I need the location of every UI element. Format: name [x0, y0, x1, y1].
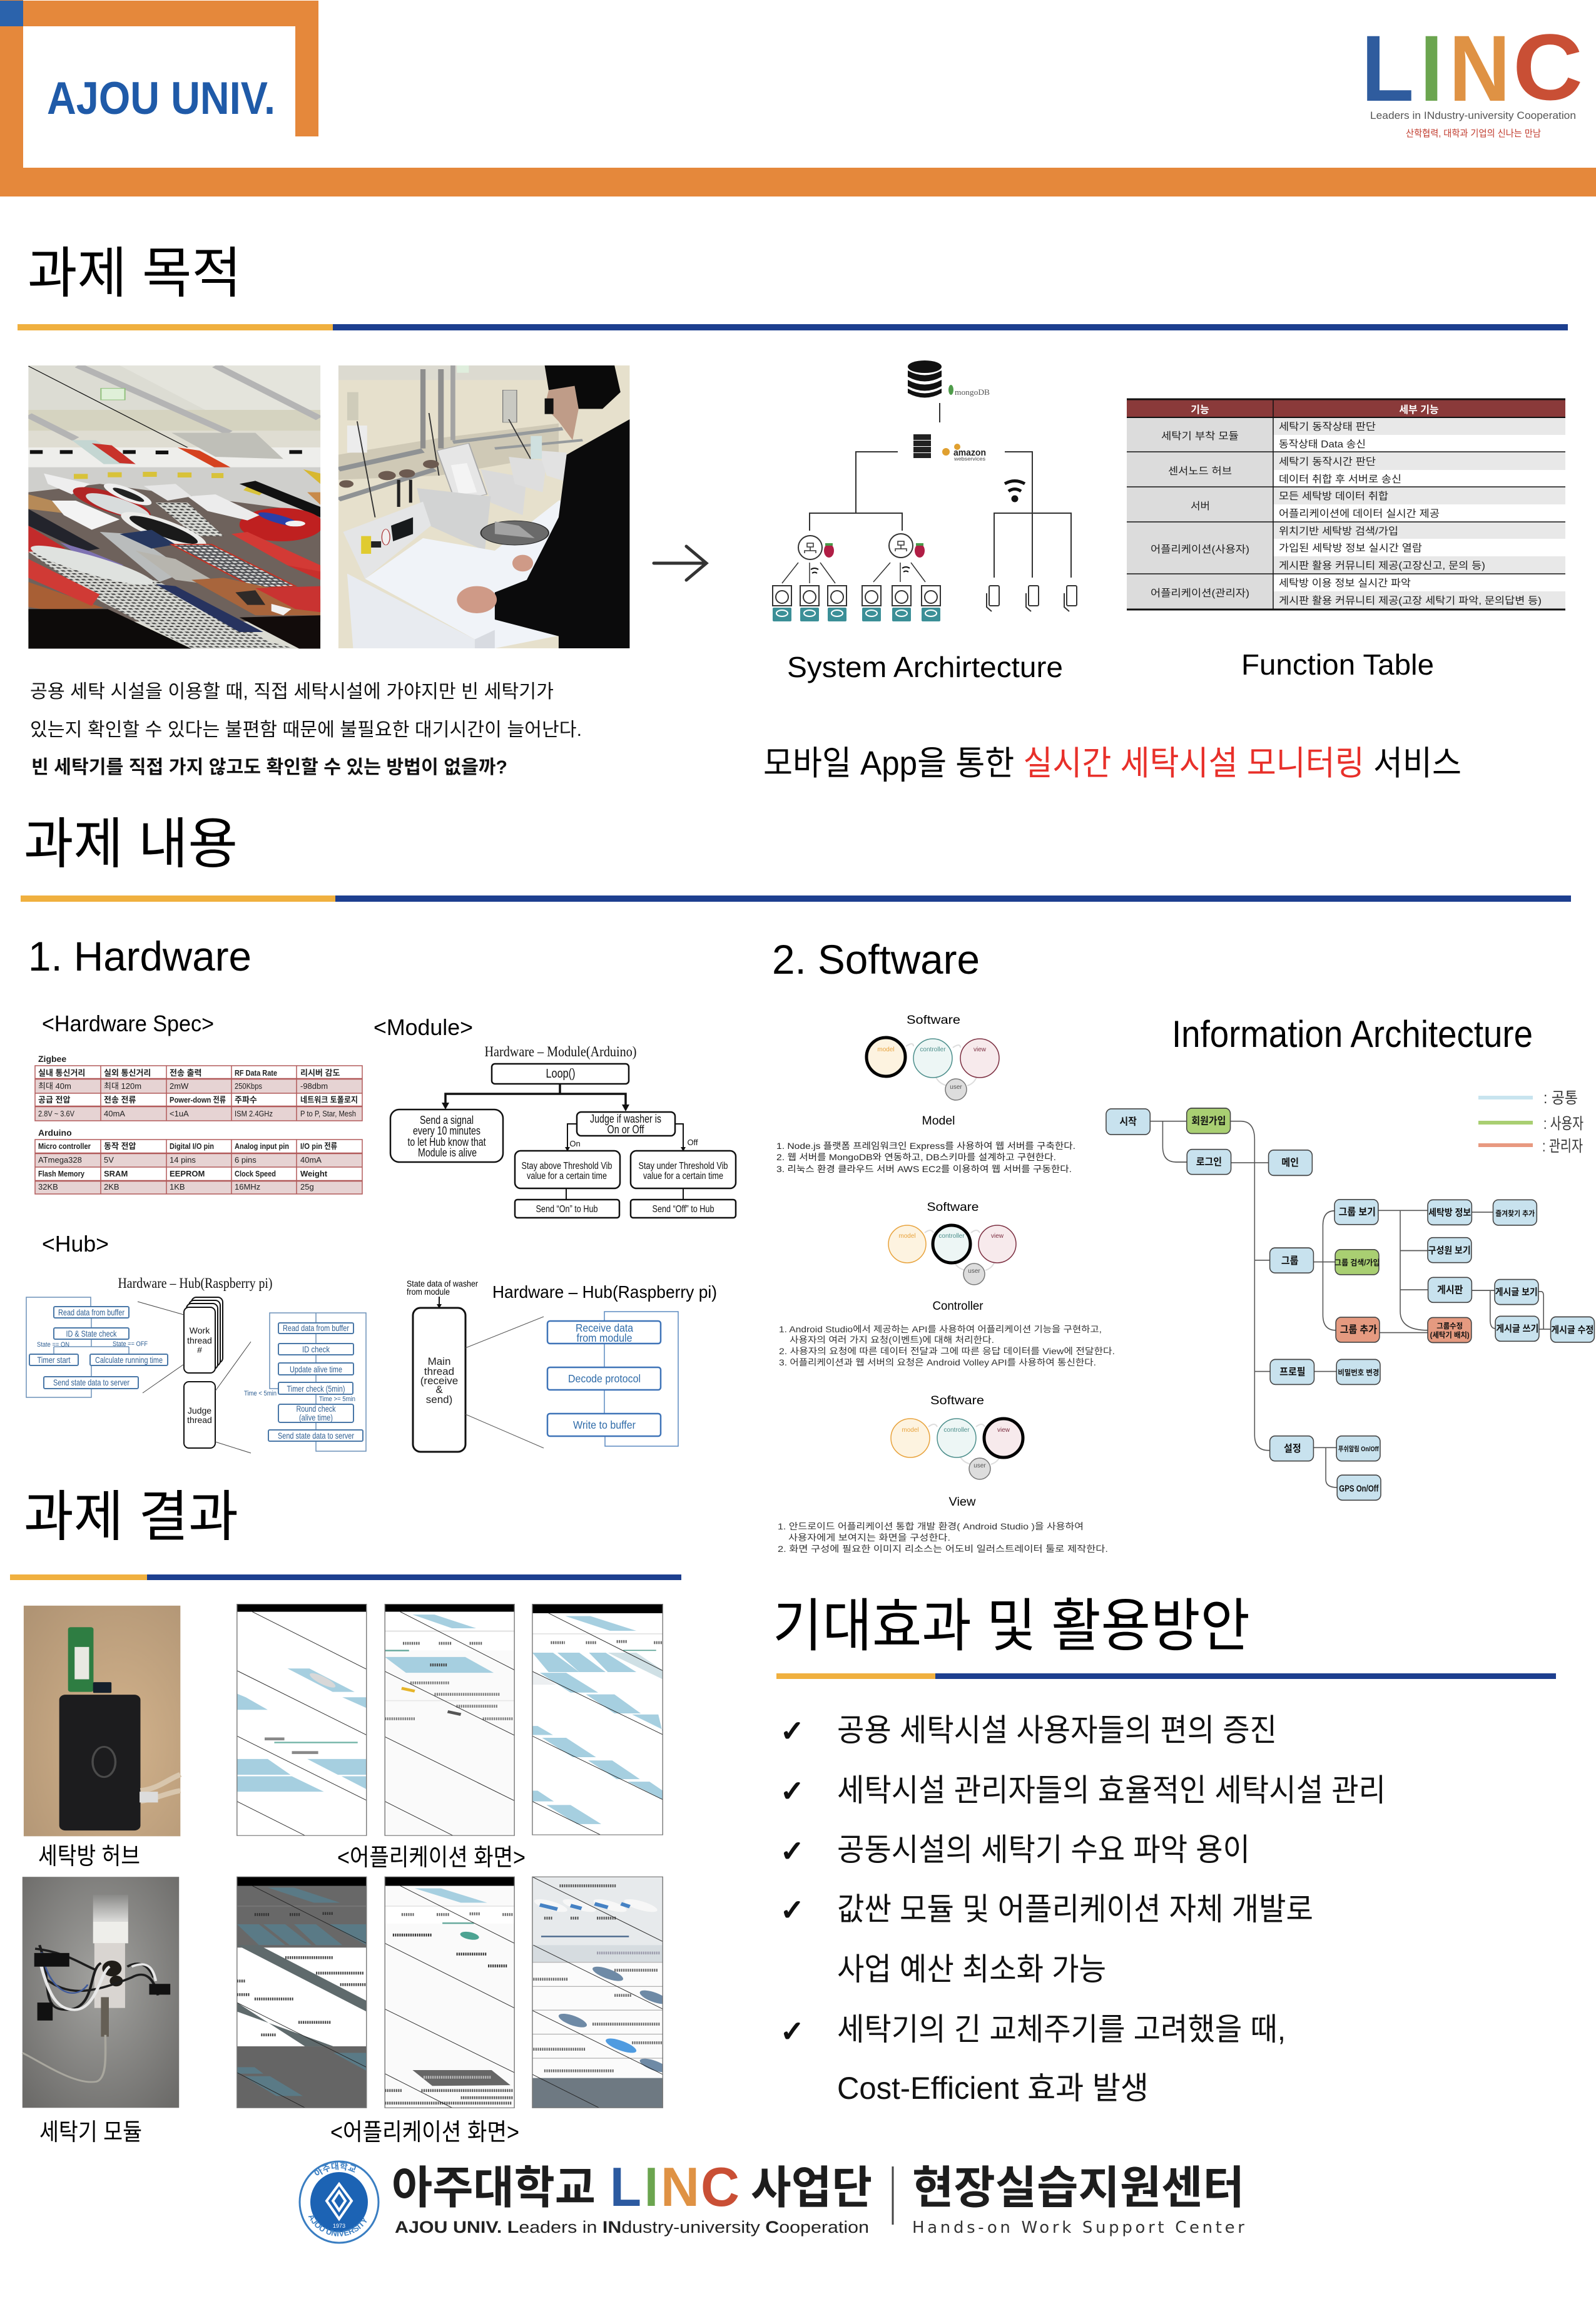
- panel: software controller: Controller: [932, 1300, 984, 1313]
- heading: 과제 결과: [10, 1486, 681, 1580]
- app screen 6: [532, 1877, 670, 2108]
- flowchart: hub main thread: State data of washer: [407, 1278, 478, 1288]
- flowchart: hub threads: [26, 1275, 366, 1453]
- table: zigbee and arduino spec: ISM 2.4GHz: [235, 1109, 273, 1118]
- flowchart: hub main thread: send): [426, 1394, 452, 1406]
- table: zigbee and arduino spec: 40mA: [300, 1155, 322, 1165]
- table: zigbee and arduino spec: 전송 전류: [104, 1095, 136, 1105]
- footer logo: Ajou University seal: [299, 2160, 379, 2244]
- flowchart: module arduino: every 10 minutes: [413, 1125, 480, 1137]
- table: function table: 가입된 세탁방 정보 실시간 열람: [1279, 543, 1422, 554]
- table: function table: 센서노드 허브: [1168, 466, 1232, 477]
- table: zigbee and arduino spec: 최대 40m: [38, 1081, 71, 1091]
- footer logo: Ajou University seal: 1973: [333, 2223, 345, 2229]
- panel: software controller: [779, 1201, 1115, 1367]
- table: zigbee and arduino spec: 네트워크 토폴로지: [300, 1095, 358, 1105]
- diagram: information architecture tree: 게시글 쓰기: [1496, 1324, 1538, 1334]
- panel: software controller: 2. 사용자의 요청에 따른 데이터 전달과 그에 따른 응답 데이터를 View에 전달한다.: [779, 1346, 1115, 1356]
- table: function table: 세탁기 부착 모듈: [1161, 431, 1239, 442]
- heading: 과제 목적: [18, 242, 1568, 330]
- flowchart: module arduino: Send “On” to Hub: [536, 1204, 598, 1215]
- flowchart: hub main thread: [407, 1278, 717, 1452]
- table: zigbee and arduino spec: SRAM: [104, 1169, 128, 1178]
- label: module: <Module>: [374, 1014, 473, 1040]
- caption: 어플리케이션 화면 top: <어플리케이션 화면>: [337, 1845, 526, 1871]
- label: hardware spec: <Hardware Spec>: [42, 1011, 214, 1036]
- table: zigbee and arduino spec: EEPROM: [170, 1169, 205, 1178]
- flowchart: hub main thread: (receive: [420, 1375, 458, 1387]
- panel: software view: 사용자에게 보여지는 화면을 구성한다.: [788, 1533, 950, 1543]
- footer logo: 아주대학교 LINC 사업단: N: [661, 2156, 699, 2218]
- flowchart: hub main thread: &: [435, 1384, 443, 1395]
- flowchart: module arduino: Send “Off” to Hub: [652, 1204, 714, 1215]
- flowchart: hub main thread: thread: [424, 1365, 454, 1377]
- table: zigbee and arduino spec: ATmega328: [38, 1155, 82, 1165]
- flowchart: hub threads: ID & State check: [66, 1329, 117, 1339]
- logo: LINC: [1361, 14, 1583, 139]
- table: function table: 어플리케이션(사용자): [1151, 544, 1249, 555]
- list: expected effects: ✓: [780, 1893, 805, 1927]
- legend: : 공통: [1543, 1089, 1578, 1107]
- diagram: information architecture tree: 비밀번호 변경: [1338, 1369, 1379, 1377]
- logo: LINC: I: [1420, 16, 1443, 121]
- label: mongoDB: mongoDB: [955, 387, 990, 397]
- caption: 세탁기 모듈: 세탁기 모듈: [39, 2120, 142, 2146]
- diagram: information architecture tree: 설정: [1284, 1443, 1301, 1454]
- flowchart: hub main thread: from module: [407, 1287, 450, 1297]
- mvc diagram: view highlighted: user: [973, 1462, 986, 1469]
- mvc diagram: view highlighted: model: [902, 1427, 919, 1434]
- diagram: information architecture tree: 그룹 추가: [1340, 1324, 1377, 1335]
- flowchart: hub threads: Calculate running time: [95, 1355, 163, 1365]
- photo: laundry room: [23, 365, 323, 649]
- flowchart: hub main thread: Decode protocol: [568, 1372, 641, 1385]
- flowchart: hub threads: Work: [190, 1325, 210, 1335]
- table: zigbee and arduino spec: Power-down 전류: [170, 1095, 226, 1105]
- flowchart: hub threads: thread: [187, 1335, 212, 1345]
- table: zigbee and arduino spec: RF Data Rate: [235, 1068, 277, 1078]
- footer logo: 아주대학교 LINC 사업단: C: [701, 2156, 740, 2218]
- heading: information architecture: Information Architecture: [1172, 1013, 1533, 1055]
- panel: software controller: 사용자의 여러 가지 요청(이벤트)에 대해 처리한다.: [790, 1335, 994, 1345]
- table: zigbee and arduino spec: Analog input pin: [235, 1141, 289, 1151]
- table: zigbee and arduino spec: I/O pin 전류: [300, 1141, 337, 1151]
- table: function table: 세부 기능: [1399, 404, 1439, 416]
- heading: 과제 목적: 과제 목적: [28, 242, 241, 304]
- mvc diagram: controller highlighted: model: [898, 1233, 916, 1240]
- table: zigbee and arduino spec: 32KB: [38, 1182, 58, 1191]
- flowchart: module arduino: On: [569, 1139, 581, 1148]
- table: zigbee and arduino spec: [35, 1054, 362, 1194]
- diagram: information architecture tree: 세탁방 정보: [1428, 1207, 1471, 1218]
- flowchart: module arduino: Off: [687, 1138, 698, 1147]
- photo: washer module: [23, 1877, 179, 2108]
- flowchart: hub threads: Judge: [188, 1406, 211, 1416]
- flowchart: hub main thread: Receive data: [576, 1322, 633, 1334]
- mvc diagram: view highlighted: view: [997, 1427, 1010, 1434]
- diagram: information architecture tree: 즐겨찾기 추가: [1495, 1209, 1535, 1218]
- flowchart: module arduino: to let Hub know that: [408, 1136, 485, 1148]
- table: zigbee and arduino spec: 2mW: [170, 1081, 189, 1091]
- list: expected effects: ✓: [780, 1714, 805, 1748]
- table: zigbee and arduino spec: 공급 전압: [38, 1095, 70, 1105]
- table: zigbee and arduino spec: 주파수: [235, 1095, 257, 1105]
- flowchart: module arduino: Send a signal: [420, 1114, 474, 1126]
- table: zigbee and arduino spec: Micro controller: [38, 1141, 91, 1151]
- diagram: information architecture tree: 푸쉬알림 On/Off: [1338, 1445, 1379, 1453]
- label: hub: <Hub>: [42, 1231, 109, 1257]
- flowchart: hub threads: Round check: [297, 1404, 336, 1414]
- panel: software view: View: [948, 1496, 976, 1509]
- text block: problem statement: 빈 세탁기를 직접 가지 않고도 확인할 수 있는 방법이 없을까?: [31, 757, 507, 778]
- logo: LINC: N: [1449, 16, 1510, 121]
- table: zigbee and arduino spec: 6 pins: [235, 1155, 257, 1165]
- icon: database: [908, 360, 942, 398]
- service statement: 모바일 App을 통한 실시간 세탁시설 모니터링 서비스: [763, 745, 1461, 782]
- heading: 과제 내용: [21, 813, 1571, 902]
- legend: : 사용자: [1543, 1115, 1583, 1133]
- app screen 1: [237, 1605, 367, 1835]
- list: expected effects: [780, 1713, 1386, 2106]
- table: zigbee and arduino spec: 전송 출력: [170, 1068, 201, 1078]
- table: zigbee and arduino spec: 동작 전압: [104, 1141, 136, 1151]
- legend: [1478, 1089, 1583, 1155]
- diagram: system architecture: [773, 360, 1077, 621]
- list: expected effects: 공동시설의 세탁기 수요 파악 용이: [837, 1832, 1250, 1867]
- table: zigbee and arduino spec: 5V: [104, 1155, 114, 1165]
- flowchart: hub threads: Read data from buffer: [283, 1323, 349, 1333]
- flowchart: hub threads: State == OFF: [113, 1340, 148, 1348]
- footer logo: 현장실습지원센터: 현장실습지원센터: [912, 2163, 1244, 2213]
- flowchart: hub main thread: from module: [577, 1332, 632, 1344]
- table: function table: 게시판 활용 커뮤니티 제공(고장 세탁기 파악, 문의답변 등): [1279, 595, 1542, 606]
- flowchart: module arduino: value for a certain time: [527, 1171, 607, 1181]
- list: expected effects: 사업 예산 최소화 가능: [837, 1952, 1106, 1987]
- flowchart: hub threads: thread: [187, 1415, 212, 1425]
- footer logo: 아주대학교 LINC 사업단: AJOU UNIV. L eaders in INdustry-university Cooperation: [395, 2218, 869, 2237]
- caption: function table: Function Table: [1241, 648, 1434, 681]
- text block: problem statement: 있는지 확인할 수 있다는 불편함 때문에 불필요한 대기시간이 늘어난다.: [30, 720, 582, 740]
- list: expected effects: ✓: [780, 1774, 805, 1808]
- footer logo: Ajou University seal: 아주대학교: [314, 2163, 357, 2175]
- panel: software model: [776, 1014, 1075, 1174]
- table: zigbee and arduino spec: 1KB: [170, 1182, 185, 1191]
- list: expected effects: 공용 세탁시설 사용자들의 편의 증진: [837, 1713, 1277, 1748]
- diagram: information architecture tree: (세탁기 배치): [1430, 1330, 1470, 1339]
- icon: server: [913, 434, 931, 458]
- table: zigbee and arduino spec: <1uA: [170, 1109, 189, 1118]
- flowchart: hub threads: (alive time): [299, 1412, 333, 1422]
- footer logo: 현장실습지원센터: [912, 2163, 1244, 2237]
- diagram: information architecture tree: 프로필: [1279, 1366, 1306, 1378]
- panel: software controller: 1. Android Studio에서 제공하는 API를 사용하여 어플리케이션 기능을 구현하고,: [779, 1324, 1102, 1334]
- flowchart: hub threads: Time >= 5min: [319, 1395, 355, 1403]
- flowchart: hub threads: Timer start: [38, 1355, 71, 1365]
- app screen 4: [237, 1877, 367, 2108]
- mvc diagram: controller highlighted: view: [991, 1233, 1004, 1240]
- footer logo: 아주대학교 LINC 사업단: 아주대학교: [392, 2163, 596, 2213]
- table: zigbee and arduino spec: 실외 통신거리: [104, 1068, 151, 1078]
- footer logo: Ajou University seal: AJOU UNIVERSITY: [308, 2215, 367, 2237]
- table: zigbee and arduino spec: Digital I/O pin: [170, 1141, 214, 1151]
- table: function table: 세탁기 동작시간 판단: [1279, 456, 1376, 467]
- table: function table: 데이터 취합 후 서버로 송신: [1279, 474, 1401, 485]
- table: function table: 서버: [1191, 501, 1210, 512]
- table: function table: 모든 세탁방 데이터 취합: [1279, 491, 1388, 502]
- table: function table: 어플리케이션(관리자): [1151, 588, 1249, 599]
- footer divider: [892, 2166, 893, 2225]
- footer logo: 아주대학교 LINC 사업단: L: [610, 2156, 641, 2218]
- heading: 기대효과 및 활용방안: [773, 1594, 1556, 1679]
- header band: [0, 0, 1596, 196]
- label: mongoDB: [948, 385, 990, 397]
- list: expected effects: 값싼 모듈 및 어플리케이션 자체 개발로: [837, 1892, 1313, 1927]
- legend: : 관리자: [1542, 1138, 1583, 1155]
- panel: software view: 1. 안드로이드 어플리케이션 통합 개발 환경( Android Studio )을 사용하여: [778, 1521, 1084, 1531]
- flowchart: module arduino: Module is alive: [418, 1146, 477, 1159]
- table: zigbee and arduino spec: Zigbee: [38, 1054, 66, 1064]
- flowchart: module arduino: Judge if washer is: [590, 1113, 661, 1125]
- table: function table: 세탁기 동작상태 판단: [1279, 421, 1376, 432]
- diagram: information architecture tree: 로그인: [1196, 1156, 1222, 1168]
- flowchart: hub main thread: Hardware – Hub(Raspberry pi): [492, 1282, 717, 1302]
- mvc diagram: controller highlighted: [888, 1225, 1016, 1285]
- icon: washers and arduino boards: [773, 586, 940, 621]
- icon: hubs: [798, 534, 925, 559]
- panel: software model: Model: [922, 1115, 955, 1128]
- list: expected effects: ✓: [780, 2014, 805, 2048]
- app screen 5: [385, 1877, 514, 2108]
- caption: 어플리케이션 화면 bottom: <어플리케이션 화면>: [330, 2120, 519, 2146]
- table: zigbee and arduino spec: 2.8V ~ 3.6V: [38, 1109, 74, 1118]
- diagram: information architecture tree: 구성원 보기: [1428, 1245, 1471, 1256]
- flowchart: hub threads: Read data from buffer: [58, 1307, 125, 1317]
- flowchart: module arduino: Stay under Threshold Vib: [638, 1161, 728, 1171]
- list: expected effects: ✓: [780, 1834, 805, 1868]
- mvc diagram: model highlighted: user: [950, 1084, 962, 1091]
- app screens: top row: [237, 1605, 663, 1835]
- table: zigbee and arduino spec: 16MHz: [235, 1182, 260, 1191]
- panel: software view: Software: [930, 1394, 984, 1407]
- table: zigbee and arduino spec: 40mA: [104, 1109, 125, 1118]
- table: zigbee and arduino spec: 최대 120m: [104, 1081, 141, 1091]
- table: function table: 기능: [1191, 404, 1209, 416]
- flowchart: module arduino: [390, 1044, 736, 1218]
- diagram: information architecture tree: GPS On/Off: [1339, 1484, 1379, 1494]
- mvc diagram: model highlighted: model: [877, 1046, 895, 1053]
- logo: LINC: Leaders in INdustry-university Cooperation: [1370, 110, 1576, 121]
- diagram: information architecture tree: 시작: [1119, 1116, 1137, 1128]
- flowchart: module arduino: On or Off: [607, 1123, 644, 1136]
- table: function table: 게시판 활용 커뮤니티 제공(고장신고, 문의 등): [1279, 560, 1485, 571]
- logo: LINC: 산학협력, 대학과 기업의 신나는 만남: [1406, 128, 1541, 139]
- heading: 기대효과 및 활용방안: 기대효과 및 활용방안: [773, 1594, 1250, 1658]
- flowchart: hub threads: Time < 5min: [244, 1390, 277, 1397]
- table: function table: 세탁방 이용 정보 실시간 파악: [1279, 578, 1411, 589]
- table: zigbee and arduino spec: 리시버 감도: [300, 1068, 340, 1078]
- table: zigbee and arduino spec: P to P, Star, Mesh: [300, 1109, 356, 1118]
- text block: problem statement: 공용 세탁 시설을 이용할 때, 직접 세탁시설에 가야지만 빈 세탁기가: [30, 681, 554, 702]
- panel: software model: Software: [907, 1014, 960, 1027]
- table: zigbee and arduino spec: Arduino: [38, 1128, 72, 1138]
- diagram: information architecture tree: 그룹수정: [1436, 1322, 1463, 1330]
- flowchart: hub threads: State == ON: [37, 1341, 69, 1349]
- footer logo: 아주대학교 LINC 사업단: 사업단: [751, 2163, 872, 2213]
- photo: person checking washer: [338, 365, 629, 648]
- icon: wifi: [1005, 481, 1025, 501]
- flowchart: module arduino: value for a certain time: [643, 1171, 723, 1181]
- heading: 2. Software: 2. Software: [772, 936, 980, 982]
- table: zigbee and arduino spec: 2KB: [104, 1182, 119, 1191]
- flowchart: hub threads: ID check: [302, 1344, 330, 1354]
- footer logo: 현장실습지원센터: Hands-on Work Support Center: [912, 2218, 1244, 2237]
- app screen 2: [385, 1605, 514, 1835]
- arrow: [654, 546, 706, 580]
- panel: software controller: 3. 어플리케이션과 웹 서버의 요청은 Android Volley API를 사용하여 통신한다.: [779, 1357, 1096, 1367]
- panel: software view: 2. 화면 구성에 필요한 이미지 리소스는 어도비 일러스트레이터 툴로 제작한다.: [778, 1544, 1108, 1554]
- footer logo: 아주대학교 LINC 사업단: I: [644, 2156, 658, 2218]
- heading: 과제 내용: 과제 내용: [24, 813, 238, 875]
- diagram: information architecture tree: 그룹 보기: [1339, 1207, 1376, 1218]
- table: function table: 위치기반 세탁방 검색/가입: [1279, 526, 1398, 537]
- mvc diagram: model highlighted: [867, 1038, 999, 1100]
- table: zigbee and arduino spec: 실내 통신거리: [38, 1068, 85, 1078]
- heading: 1. Hardware: 1. Hardware: [28, 933, 252, 979]
- diagram: information architecture tree: 게시글 보기: [1495, 1287, 1538, 1297]
- panel: software model: 3. 리눅스 환경 클라우드 서버 AWS EC2를 이용하여 웹 서버를 구동한다.: [776, 1164, 1072, 1174]
- table: zigbee and arduino spec: 25g: [300, 1182, 314, 1191]
- panel: software model: 2. 웹 서버를 MongoDB와 연동하고, DB스키마를 설계하고 구현한다.: [776, 1152, 1056, 1162]
- table: function table: 동작상태 Data 송신: [1279, 439, 1366, 450]
- logo: LINC: C: [1513, 14, 1583, 120]
- app screen 3: [532, 1605, 663, 1835]
- label: amazon web services: webservices: [953, 456, 985, 462]
- diagram: information architecture tree: 그룹 검색/가입: [1334, 1258, 1380, 1267]
- text block: problem statement: [30, 681, 582, 778]
- caption: system architecture: System Archirtecture: [787, 651, 1063, 683]
- photo: laundry hub: [24, 1606, 180, 1836]
- panel: software view: [778, 1394, 1108, 1554]
- flowchart: hub main thread: Write to buffer: [573, 1419, 636, 1431]
- app screens: bottom row: [237, 1877, 670, 2108]
- diagram: information architecture tree: [1106, 1108, 1594, 1500]
- table: zigbee and arduino spec: Weight: [300, 1169, 328, 1178]
- table: zigbee and arduino spec: 14 pins: [170, 1155, 196, 1165]
- list: expected effects: 세탁기의 긴 교체주기를 고려했을 때,: [837, 2012, 1286, 2047]
- diagram: information architecture tree: 메인: [1281, 1157, 1299, 1168]
- flowchart: hub main thread: Main: [428, 1355, 450, 1367]
- flowchart: hub threads: Update alive time: [290, 1364, 342, 1374]
- heading: 과제 결과: 과제 결과: [24, 1486, 238, 1548]
- panel: software model: 1. Node.js 플랫폼 프레임워크인 Express를 사용하여 웹 서버를 구축한다.: [776, 1141, 1075, 1151]
- mvc diagram: controller highlighted: user: [968, 1268, 980, 1275]
- footer logo: 아주대학교 LINC 사업단: [392, 2156, 872, 2237]
- logo: AJOU UNIV: AJOU UNIV.: [47, 73, 275, 124]
- flowchart: module arduino: Hardware – Module(Arduino): [484, 1044, 637, 1059]
- diagram: information architecture tree: 회원가입: [1191, 1115, 1226, 1127]
- list: expected effects: Cost-Efficient 효과 발생: [837, 2071, 1149, 2106]
- flowchart: hub threads: Send state data to server: [278, 1431, 354, 1441]
- panel: software controller: Software: [927, 1201, 978, 1214]
- table: zigbee and arduino spec: 250Kbps: [235, 1081, 262, 1091]
- table: function table: 어플리케이션에 데이터 실시간 제공: [1279, 508, 1440, 519]
- diagram: information architecture tree: 게시글 수정: [1551, 1325, 1593, 1335]
- flowchart: hub threads: #: [197, 1345, 202, 1355]
- mvc diagram: view highlighted: [891, 1419, 1023, 1479]
- flowchart: module arduino: Loop(): [546, 1067, 576, 1081]
- mvc diagram: model highlighted: view: [973, 1046, 987, 1053]
- logo: LINC: L: [1361, 16, 1414, 121]
- mvc diagram: controller highlighted: controller: [938, 1233, 965, 1240]
- table: zigbee and arduino spec: Flash Memory: [38, 1169, 85, 1178]
- label: amazon web services: [942, 444, 986, 462]
- flowchart: hub threads: Send state data to server: [53, 1377, 130, 1387]
- mvc diagram: model highlighted: controller: [920, 1046, 946, 1053]
- flowchart: hub threads: Hardware – Hub(Raspberry pi): [118, 1275, 273, 1291]
- diagram: information architecture tree: 게시판: [1437, 1284, 1463, 1296]
- mvc diagram: view highlighted: controller: [943, 1427, 970, 1434]
- icon: phones: [987, 586, 1077, 611]
- caption: 세탁방 허브: 세탁방 허브: [38, 1844, 140, 1870]
- table: zigbee and arduino spec: Clock Speed: [235, 1169, 276, 1178]
- table: function table: [1127, 399, 1565, 610]
- flowchart: module arduino: Stay above Threshold Vib: [522, 1161, 612, 1171]
- label: amazon web services: amazon: [953, 447, 986, 458]
- table: zigbee and arduino spec: -98dbm: [300, 1081, 328, 1091]
- list: expected effects: 세탁시설 관리자들의 효율적인 세탁시설 관리: [837, 1773, 1386, 1808]
- diagram: information architecture tree: 그룹: [1281, 1255, 1298, 1267]
- flowchart: hub threads: Timer check (5min): [287, 1384, 345, 1394]
